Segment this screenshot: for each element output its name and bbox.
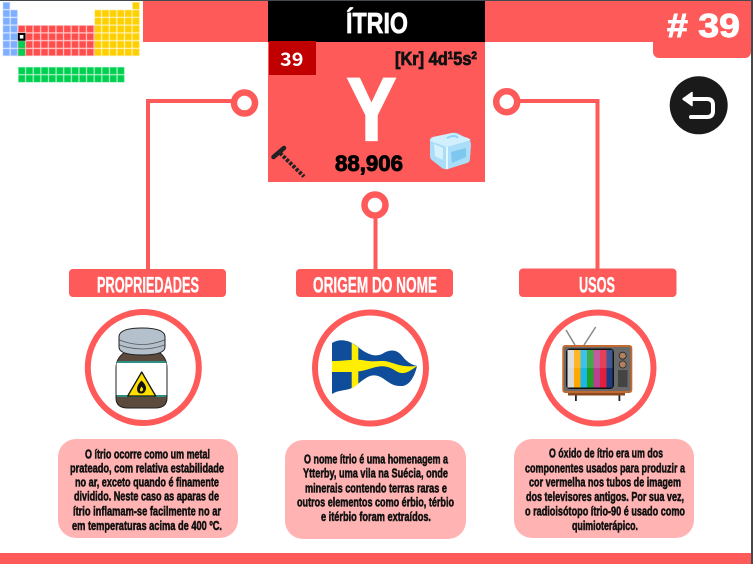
text block: usos: o radioisótopo ítrio-90 é usado como (525, 504, 685, 518)
connector: usos (496, 91, 598, 270)
text block: origem do nome: minerais contendo terras raras e (305, 480, 447, 496)
element name: ÍTRIO (346, 6, 408, 40)
electron configuration: 5s (453, 49, 471, 69)
text block: usos: componentes usados para produzir a (525, 460, 686, 476)
text block: origem do nome: e itérbio foram extraídos. (321, 509, 431, 524)
text block: origem do nome (285, 440, 466, 539)
icon: swedish flag in circle (315, 312, 426, 424)
atomic number box (269, 41, 316, 75)
text block: usos: quimioterápico. (572, 518, 638, 533)
text block: propriedades: prateado, com relativa estabilidade (70, 460, 224, 476)
electron configuration: 1 (448, 50, 453, 62)
text block: origem do nome: outros elementos como érbio, térbio (297, 494, 454, 510)
icon: screw (274, 148, 304, 176)
panel: propriedades (58, 269, 238, 538)
atomic mass: 88,906 (335, 151, 403, 176)
text block: usos: dos televisores antigos. Por sua vez, (526, 489, 684, 504)
element number tag: # 39 (667, 7, 740, 44)
heading: usos: USOS (579, 272, 615, 298)
electron configuration: 2 (471, 50, 477, 62)
connector: propriedades (148, 92, 255, 270)
text block: propriedades: dividido. Neste caso as aparas de (74, 488, 219, 504)
icon: back button (670, 76, 728, 134)
element symbol: Y (347, 59, 396, 159)
icon: flammable jar in circle (88, 312, 199, 423)
title bar (268, 1, 485, 42)
heading: propriedades: PROPRIEDADES (97, 272, 199, 298)
text block: propriedades: ítrio inflamam-se facilmente no ar (73, 504, 221, 518)
text block: origem do nome: Ytterby, uma vila na Suécia, onde (303, 466, 448, 480)
heading: usos (519, 268, 676, 298)
heading: propriedades (69, 269, 226, 298)
text block: propriedades: O ítrio ocorre como um metal (85, 446, 210, 462)
text block: propriedades: em temperaturas acima de 400 ºC. (72, 518, 222, 533)
text block: propriedades: no ar, exceto quando é finamente (75, 474, 219, 490)
connector: origem do nome (364, 194, 386, 270)
text block: propriedades (58, 439, 238, 538)
element card (268, 1, 485, 182)
electron configuration: [Kr] 4d (395, 49, 453, 69)
card background (268, 42, 485, 182)
footer band (0, 553, 751, 564)
text block: usos: cor vermelha nos tubos de imagem (529, 474, 681, 490)
heading: origem do nome (296, 269, 453, 298)
text block: usos: O óxido de ítrio era um dos (549, 446, 663, 460)
atomic number: 39 (280, 45, 304, 72)
icon: television in circle (542, 312, 654, 424)
heading: origem do nome: ORIGEM DO NOME (313, 272, 437, 298)
mini periodic table (3, 2, 140, 83)
text block: usos (514, 439, 694, 538)
panel: usos (514, 268, 694, 538)
panel: origem do nome (285, 269, 466, 539)
icon: ice cube (430, 133, 471, 169)
text block: origem do nome: O nome ítrio é uma homenagem a (304, 452, 449, 466)
top header band left (143, 1, 269, 42)
top header band right with number tab (485, 1, 751, 58)
